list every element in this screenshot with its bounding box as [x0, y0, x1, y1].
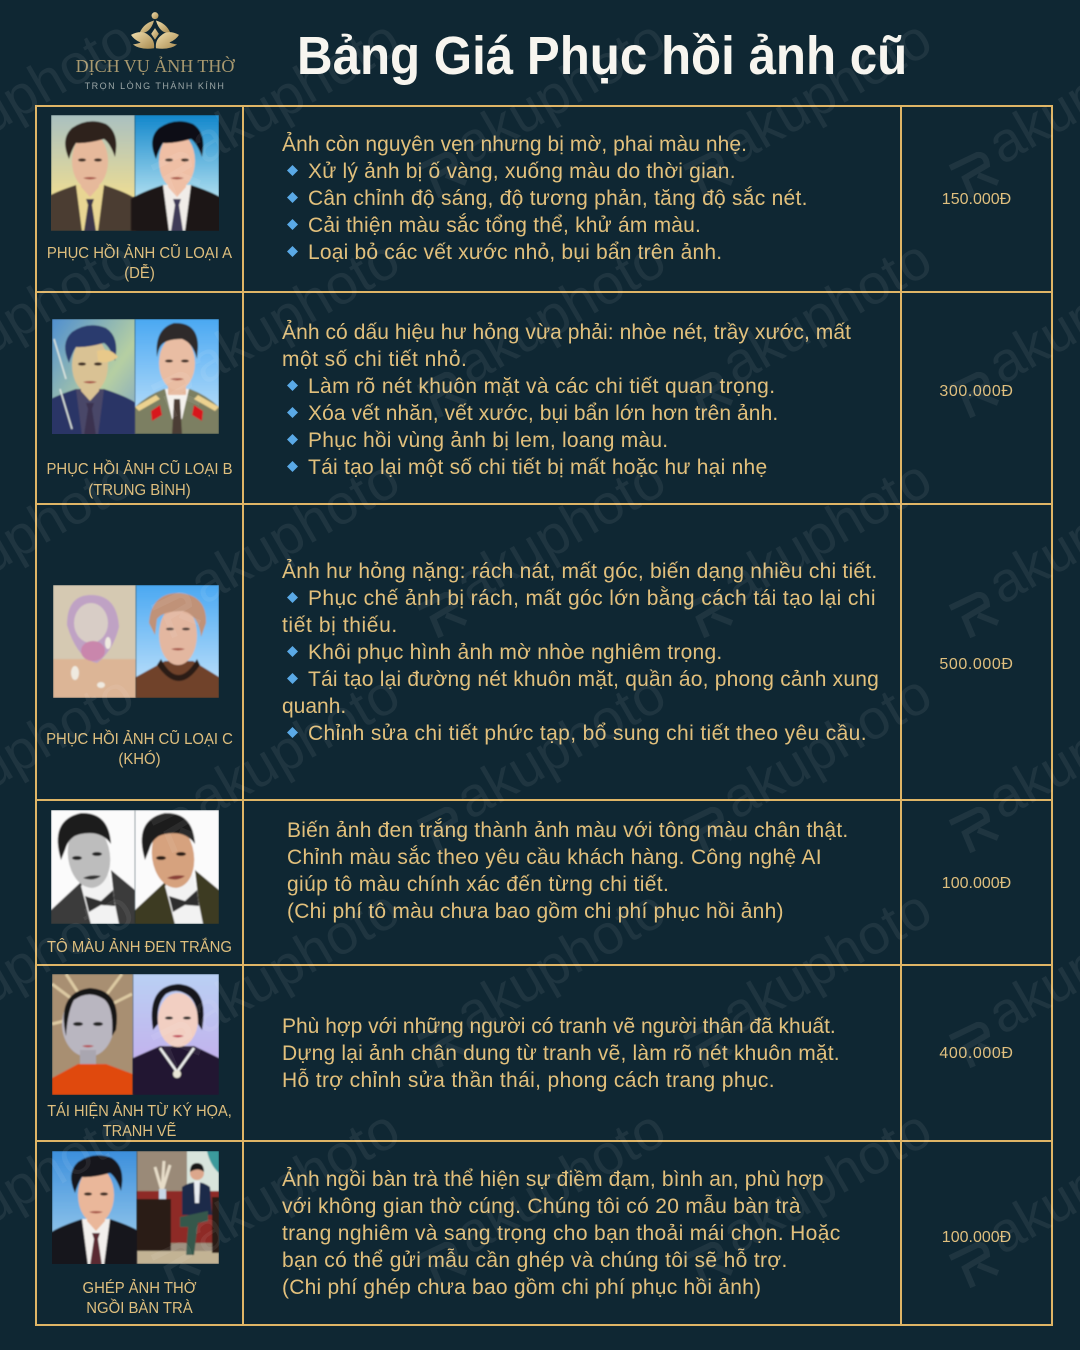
- description: Xóa vết nhăn, vết xước, bụi bẩn lớn hơn trên ảnh.: [308, 402, 778, 425]
- logo: Dịch vụ ảnh thờ: [76, 12, 235, 91]
- description: Tái tạo lại một số chi tiết bị mất hoặc hư hại nhẹ: [308, 456, 767, 479]
- caption: TÔ MÀU ẢNH ĐEN TRẮNG: [47, 939, 232, 956]
- description: [282, 1015, 840, 1092]
- description: Ảnh còn nguyên vẹn nhưng bị mờ, phai màu nhẹ.: [282, 133, 747, 156]
- description: tiết bị thiếu.: [282, 614, 398, 637]
- price: 400.000Đ: [939, 1045, 1014, 1062]
- panel: row B: [46, 319, 1014, 499]
- caption: NGỒI BÀN TRÀ: [86, 1300, 193, 1317]
- description: giúp tô màu chính xác đến từng chi tiết.: [287, 873, 669, 896]
- description: Cải thiện màu sắc tổng thể, khử ám màu.: [308, 214, 701, 237]
- caption: (KHÓ): [118, 751, 161, 768]
- caption: [46, 460, 233, 499]
- panel: row C: [46, 558, 1014, 768]
- description: Tái tạo lại đường nét khuôn mặt, quần áo, phong cảnh xung: [308, 668, 879, 691]
- description: Ảnh có dấu hiệu hư hỏng vừa phải: nhòe nét, trầy xước, mất: [282, 321, 851, 344]
- caption: [47, 1102, 232, 1140]
- description: bạn có thể gửi mẫu cần ghép và chúng tôi sẽ hỗ trợ.: [282, 1249, 788, 1272]
- logo wordmark: DỊCH VỤ ẢNH THỜ: [76, 56, 234, 76]
- description: Dựng lại ảnh chân dung từ tranh vẽ, làm rõ nét khuôn mặt.: [282, 1042, 840, 1065]
- description: [282, 320, 851, 479]
- photo pair: restoration type C: [53, 585, 219, 698]
- logo tagline: TRỌN LÒNG THÀNH KÍNH: [85, 81, 225, 91]
- description: một số chi tiết nhỏ.: [282, 348, 467, 371]
- price: 100.000Đ: [942, 1229, 1011, 1246]
- price: 300.000Đ: [939, 383, 1014, 400]
- description: Phục hồi vùng ảnh bị lem, loang màu.: [308, 429, 668, 452]
- icon: gold lotus: [131, 12, 179, 49]
- description: Phục chế ảnh bị rách, mất góc lớn bằng cách tái tạo lại chi: [308, 587, 876, 610]
- description: Chỉnh sửa chi tiết phức tạp, bổ sung chi tiết theo yêu cầu.: [308, 722, 867, 745]
- caption: PHỤC HỒI ẢNH CŨ LOẠI A: [47, 245, 232, 262]
- title: Bảng Giá Phục hồi ảnh cũ: [297, 26, 907, 86]
- description: [282, 1166, 841, 1299]
- photo pair: restoration type A: [51, 115, 219, 231]
- caption: TÁI HIỆN ẢNH TỪ KÝ HỌA,: [47, 1103, 232, 1120]
- caption: (TRUNG BÌNH): [88, 482, 191, 499]
- description: Chỉnh màu sắc theo yêu cầu khách hàng. Công nghệ AI: [287, 846, 822, 869]
- caption: GHÉP ẢNH THỜ: [83, 1280, 196, 1297]
- description: Ảnh ngồi bàn trà thể hiện sự điềm đạm, bình an, phù hợp: [282, 1168, 824, 1191]
- caption: [46, 730, 233, 768]
- description: Hỗ trợ chỉnh sửa thần thái, phong cách trang phục.: [282, 1069, 775, 1092]
- panel: row A: [47, 115, 1011, 282]
- description: (Chi phí tô màu chưa bao gồm chi phí phục hồi ảnh): [287, 900, 784, 923]
- description: với không gian thờ cúng. Chúng tôi có 20 mẫu bàn trà: [282, 1195, 801, 1218]
- caption: PHỤC HỒI ẢNH CŨ LOẠI B: [46, 461, 233, 478]
- caption: [83, 1279, 196, 1317]
- panel: row D: [47, 810, 1011, 956]
- panel: row E: [47, 974, 1014, 1140]
- description: [282, 132, 808, 264]
- price: 150.000Đ: [942, 191, 1011, 208]
- price: 500.000Đ: [939, 656, 1014, 673]
- description: trang nghiêm và sang trọng cho bạn thoải mái chọn. Hoặc: [282, 1222, 841, 1245]
- photo pair: portrait from sketch: [52, 974, 219, 1095]
- description: Biến ảnh đen trắng thành ảnh màu với tông màu chân thật.: [287, 819, 848, 842]
- photo pair: restoration type B: [52, 319, 219, 434]
- price: 100.000Đ: [942, 875, 1011, 892]
- description: Loại bỏ các vết xước nhỏ, bụi bẩn trên ảnh.: [308, 241, 722, 264]
- caption: [47, 244, 232, 282]
- photo pair: colorize black and white: [51, 810, 219, 924]
- description: Xử lý ảnh bị ố vàng, xuống màu do thời gian.: [308, 160, 736, 183]
- description: Cân chỉnh độ sáng, độ tương phản, tăng độ sắc nét.: [308, 187, 808, 210]
- photo pair: seated tea table composite: [52, 1151, 219, 1264]
- description: Khôi phục hình ảnh mờ nhòe nghiêm trọng.: [308, 641, 722, 664]
- description: Ảnh hư hỏng nặng: rách nát, mất góc, biến dạng nhiều chi tiết.: [282, 560, 877, 583]
- description: [282, 558, 879, 745]
- description: [287, 818, 848, 923]
- panel: row F: [52, 1151, 1011, 1317]
- description: Làm rõ nét khuôn mặt và các chi tiết quan trọng.: [308, 375, 775, 398]
- description: quanh.: [282, 695, 346, 718]
- caption: TRANH VẼ: [103, 1123, 176, 1140]
- description: Phù hợp với những người có tranh vẽ người thân đã khuất.: [282, 1015, 836, 1038]
- description: (Chi phí ghép chưa bao gồm chi phí phục hồi ảnh): [282, 1276, 761, 1299]
- caption: (DỄ): [124, 265, 155, 282]
- caption: PHỤC HỒI ẢNH CŨ LOẠI C: [46, 731, 233, 748]
